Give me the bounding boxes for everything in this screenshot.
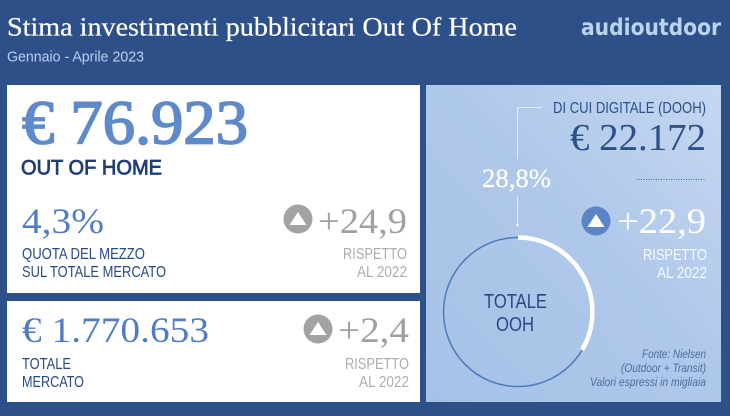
main value: € 76.923 bbox=[22, 90, 248, 158]
market label bbox=[22, 356, 84, 391]
source note bbox=[590, 347, 706, 389]
source note: Valori espressi in migliaia bbox=[590, 375, 706, 389]
change label bbox=[343, 246, 407, 281]
donut label: TOTALE bbox=[484, 291, 547, 313]
market label: MERCATO bbox=[22, 374, 84, 391]
panel: out of home bbox=[7, 85, 420, 293]
main label: OUT OF HOME bbox=[21, 156, 162, 180]
change label: AL 2022 bbox=[357, 264, 407, 281]
donut chart bbox=[444, 238, 592, 386]
donut label bbox=[484, 291, 547, 336]
share label: SUL TOTALE MERCATO bbox=[22, 264, 166, 281]
change label: AL 2022 bbox=[359, 374, 409, 391]
connector line bbox=[516, 108, 542, 226]
change label: AL 2022 bbox=[657, 265, 707, 282]
subtitle: Gennaio - Aprile 2023 bbox=[7, 48, 144, 66]
change label: RISPETTO bbox=[643, 247, 707, 264]
change value: +22,9 bbox=[617, 201, 706, 241]
market label: TOTALE bbox=[22, 356, 71, 373]
source note: (Outdoor + Transit) bbox=[621, 361, 706, 375]
header bbox=[7, 12, 517, 66]
change label bbox=[643, 247, 707, 282]
change label bbox=[345, 356, 409, 391]
donut label: OOH bbox=[496, 314, 534, 336]
icon: grey up triangle bbox=[284, 204, 312, 234]
title: Stima investimenti pubblicitari Out Of Home bbox=[7, 12, 517, 42]
digital value: € 22.172 bbox=[570, 117, 706, 159]
panel: totale mercato bbox=[7, 301, 420, 402]
digital label: DI CUI DIGITALE (DOOH) bbox=[553, 100, 706, 117]
change label: RISPETTO bbox=[343, 246, 407, 263]
icon: blue up triangle bbox=[582, 206, 610, 236]
icon: grey up triangle bbox=[304, 314, 332, 344]
source note: Fonte: Nielsen bbox=[642, 347, 706, 361]
share value: 4,3% bbox=[22, 201, 104, 241]
share label bbox=[22, 246, 166, 281]
percentage: 28,8% bbox=[482, 164, 551, 193]
share label: QUOTA DEL MEZZO bbox=[22, 246, 145, 263]
panel: digitale bbox=[426, 85, 721, 402]
change value: +24,9 bbox=[318, 201, 407, 241]
market value: € 1.770.653 bbox=[22, 310, 209, 350]
change label: RISPETTO bbox=[345, 356, 409, 373]
change value: +2,4 bbox=[338, 310, 409, 350]
